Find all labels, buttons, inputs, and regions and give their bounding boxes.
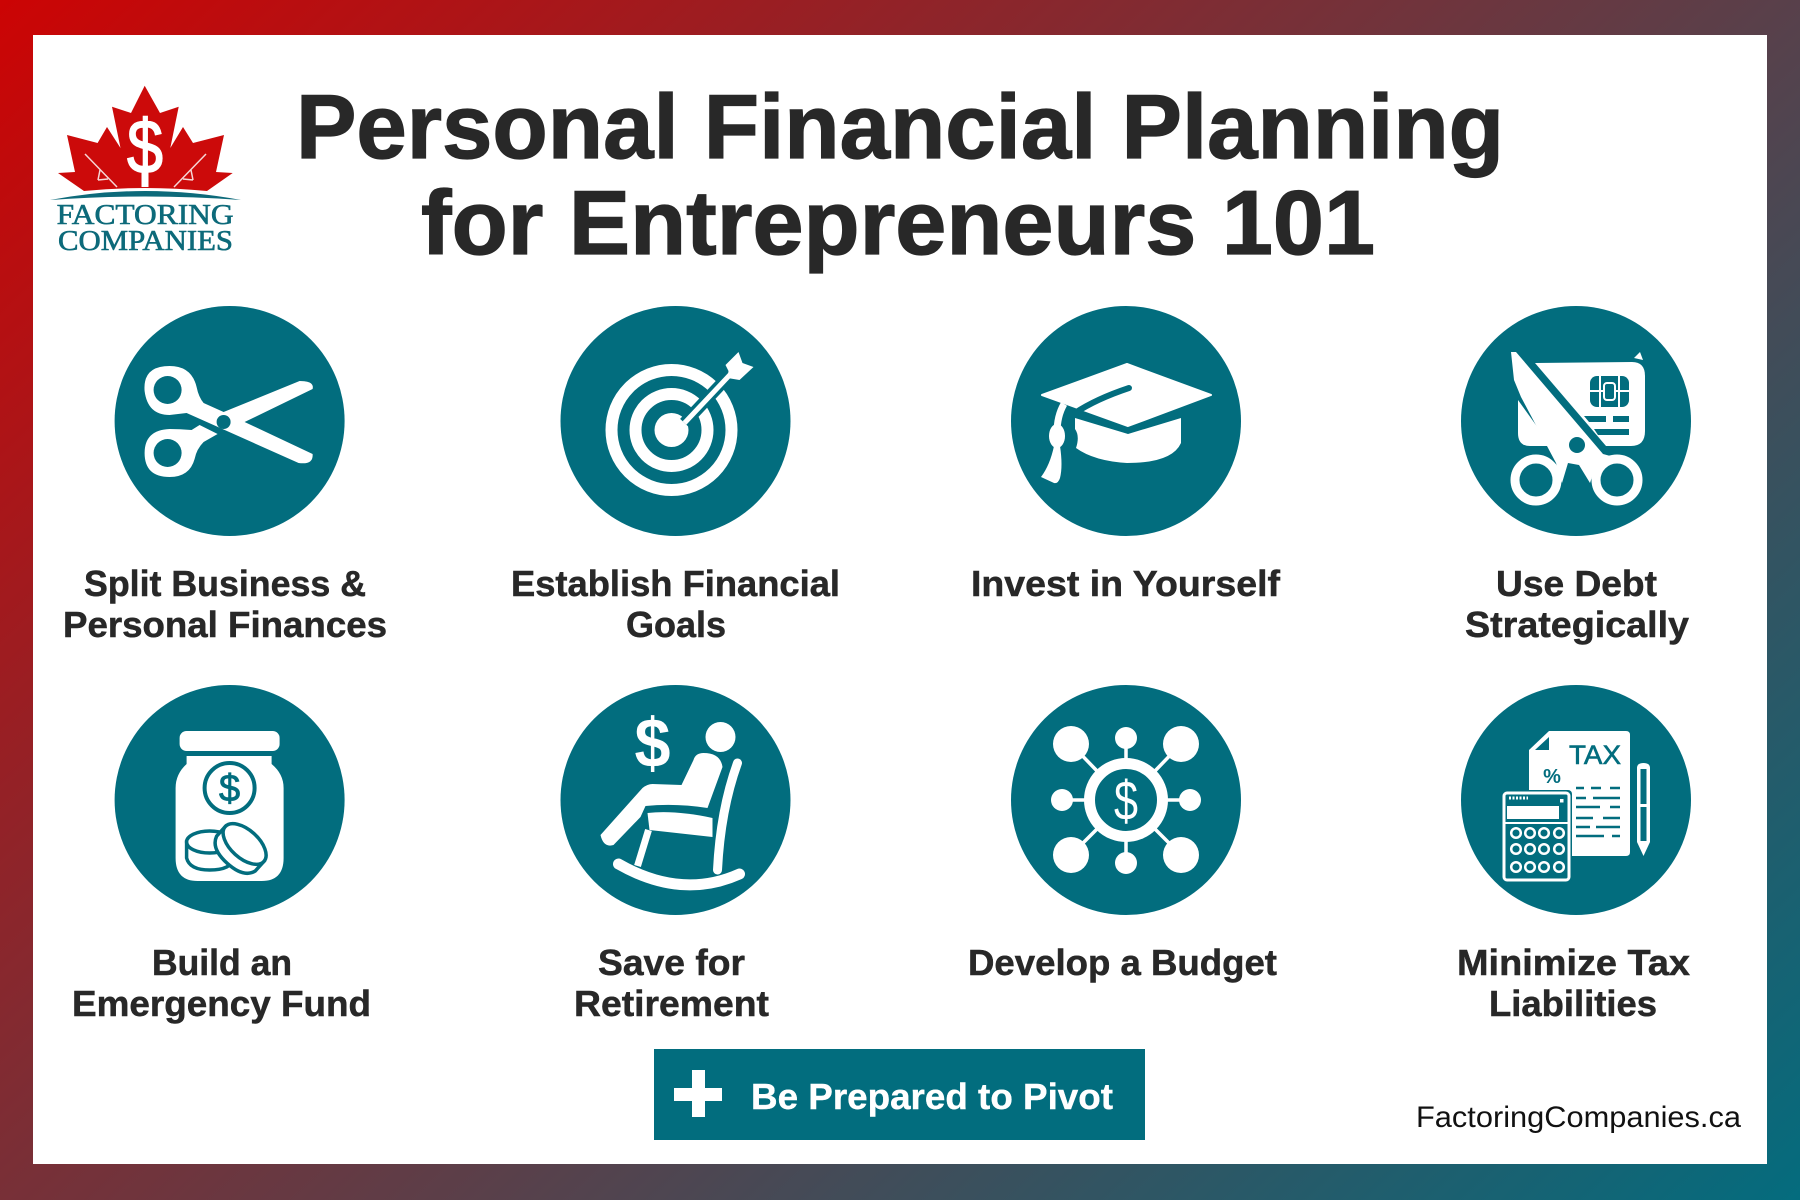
label xyxy=(63,563,387,645)
icon: scissors cutting credit card xyxy=(1461,306,1691,536)
logo wordmark: FACTORING xyxy=(57,200,234,231)
item: Establish Financial Goals xyxy=(511,306,840,645)
icon: scissors xyxy=(115,306,345,536)
icon: tax form, calculator and pen xyxy=(1461,685,1691,915)
logo: Factoring Companies: COMPANIES xyxy=(58,226,233,257)
label: Save for xyxy=(598,942,745,983)
icon: person in rocking chair: $ xyxy=(634,704,670,782)
label: Strategically xyxy=(1465,604,1689,645)
callout: Be Prepared to Pivot xyxy=(654,1049,1145,1140)
item: Invest in Yourself xyxy=(971,306,1281,604)
label xyxy=(1465,563,1689,645)
callout text: Be Prepared to Pivot xyxy=(751,1076,1113,1117)
title xyxy=(296,77,1504,274)
icon: plus xyxy=(674,1070,722,1117)
label xyxy=(511,563,840,645)
label: Split Business & xyxy=(84,563,366,604)
label: Use Debt xyxy=(1496,563,1657,604)
icon: budget network xyxy=(1011,685,1241,915)
icon: graduation cap xyxy=(1011,306,1241,536)
label: Personal Finances xyxy=(63,604,387,645)
dollar sign: $ xyxy=(127,105,163,190)
label: Minimize Tax xyxy=(1457,942,1690,983)
label: Retirement xyxy=(574,983,769,1024)
icon: savings jar xyxy=(115,685,345,915)
label: Develop a Budget xyxy=(968,942,1277,983)
icon: target with arrow xyxy=(560,306,790,536)
title: Personal Financial Planning xyxy=(296,77,1504,178)
website: FactoringCompanies.ca xyxy=(1416,1101,1741,1134)
label: Build an xyxy=(152,942,292,983)
item: Build an Emergency Fund xyxy=(72,685,371,1024)
icon: maple leaf xyxy=(58,86,233,191)
label: Invest in Yourself xyxy=(971,563,1281,604)
item: Minimize Tax Liabilities xyxy=(1457,685,1691,1024)
label xyxy=(72,942,371,1024)
label: Emergency Fund xyxy=(72,983,371,1024)
title: for Entrepreneurs 101 xyxy=(421,173,1375,274)
label xyxy=(1457,942,1690,1024)
item: Use Debt Strategically xyxy=(1461,306,1691,645)
icon: person in rocking chair xyxy=(560,685,790,915)
label: Establish Financial xyxy=(511,563,840,604)
icon: budget network: $ xyxy=(1114,769,1138,832)
teal horizon xyxy=(50,191,241,200)
label: Goals xyxy=(626,604,726,645)
item: Save for Retirement xyxy=(560,685,790,1024)
icon: savings jar: $ xyxy=(219,768,240,810)
label xyxy=(574,942,769,1024)
item: Split Business & Personal Finances xyxy=(63,306,387,645)
icon: tax form, calculator and pen: TAX xyxy=(1569,740,1621,770)
item: Develop a Budget xyxy=(968,685,1277,983)
label: Liabilities xyxy=(1489,983,1657,1024)
icon: tax form, calculator and pen: % xyxy=(1543,766,1561,788)
logo: Factoring Companies xyxy=(50,86,241,257)
